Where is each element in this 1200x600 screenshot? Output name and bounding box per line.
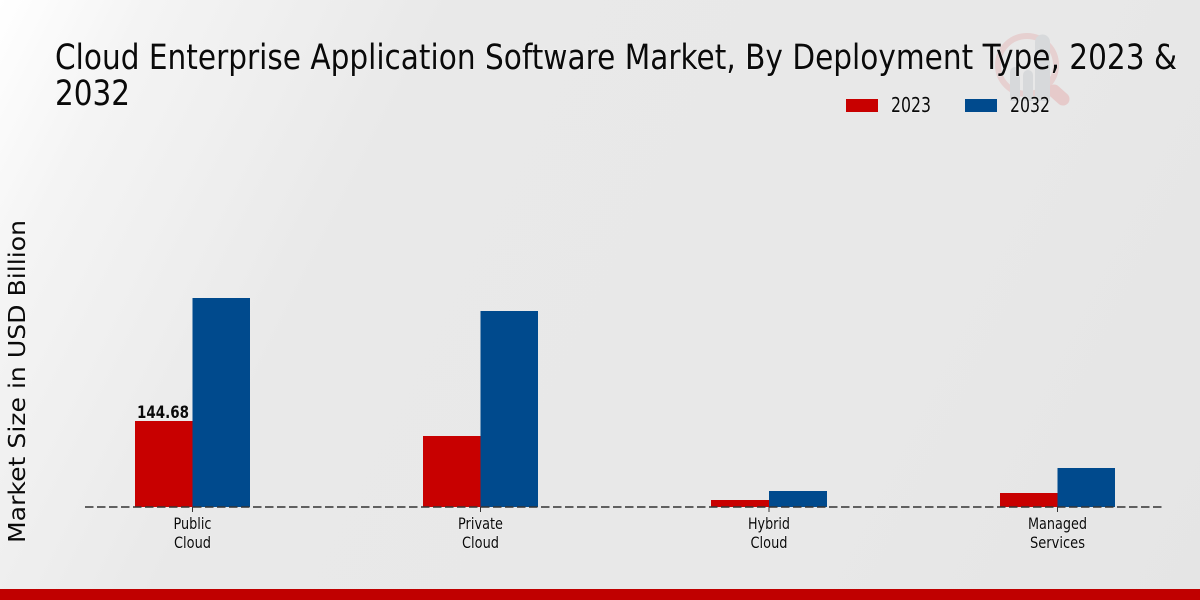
title: 2032 <box>55 74 130 114</box>
icon: watermark magnifier with bars <box>998 35 1063 101</box>
bars: Public Cloud <box>135 298 250 507</box>
category labels: Private <box>458 514 503 533</box>
title <box>55 38 1177 114</box>
category labels: Services <box>1030 533 1085 552</box>
legend <box>846 93 1050 117</box>
bars: Private Cloud <box>423 311 538 507</box>
category labels: Cloud <box>462 533 499 552</box>
bars: Managed Services <box>1000 468 1115 507</box>
legend: 2023 <box>891 93 931 117</box>
category labels: Cloud <box>174 533 211 552</box>
bars: Hybrid Cloud <box>711 491 827 507</box>
bar chart <box>85 298 1165 552</box>
category labels: Cloud <box>750 533 788 552</box>
bars: Public Cloud: 144.68 <box>137 403 189 422</box>
y-axis label: Market Size in USD Billion <box>5 220 31 543</box>
category labels: Public <box>174 514 212 533</box>
category labels: Hybrid <box>748 514 790 533</box>
footer bar <box>0 589 1200 600</box>
category labels <box>174 514 1087 552</box>
legend: 2032 <box>1010 93 1050 117</box>
category labels: Managed <box>1028 514 1087 533</box>
